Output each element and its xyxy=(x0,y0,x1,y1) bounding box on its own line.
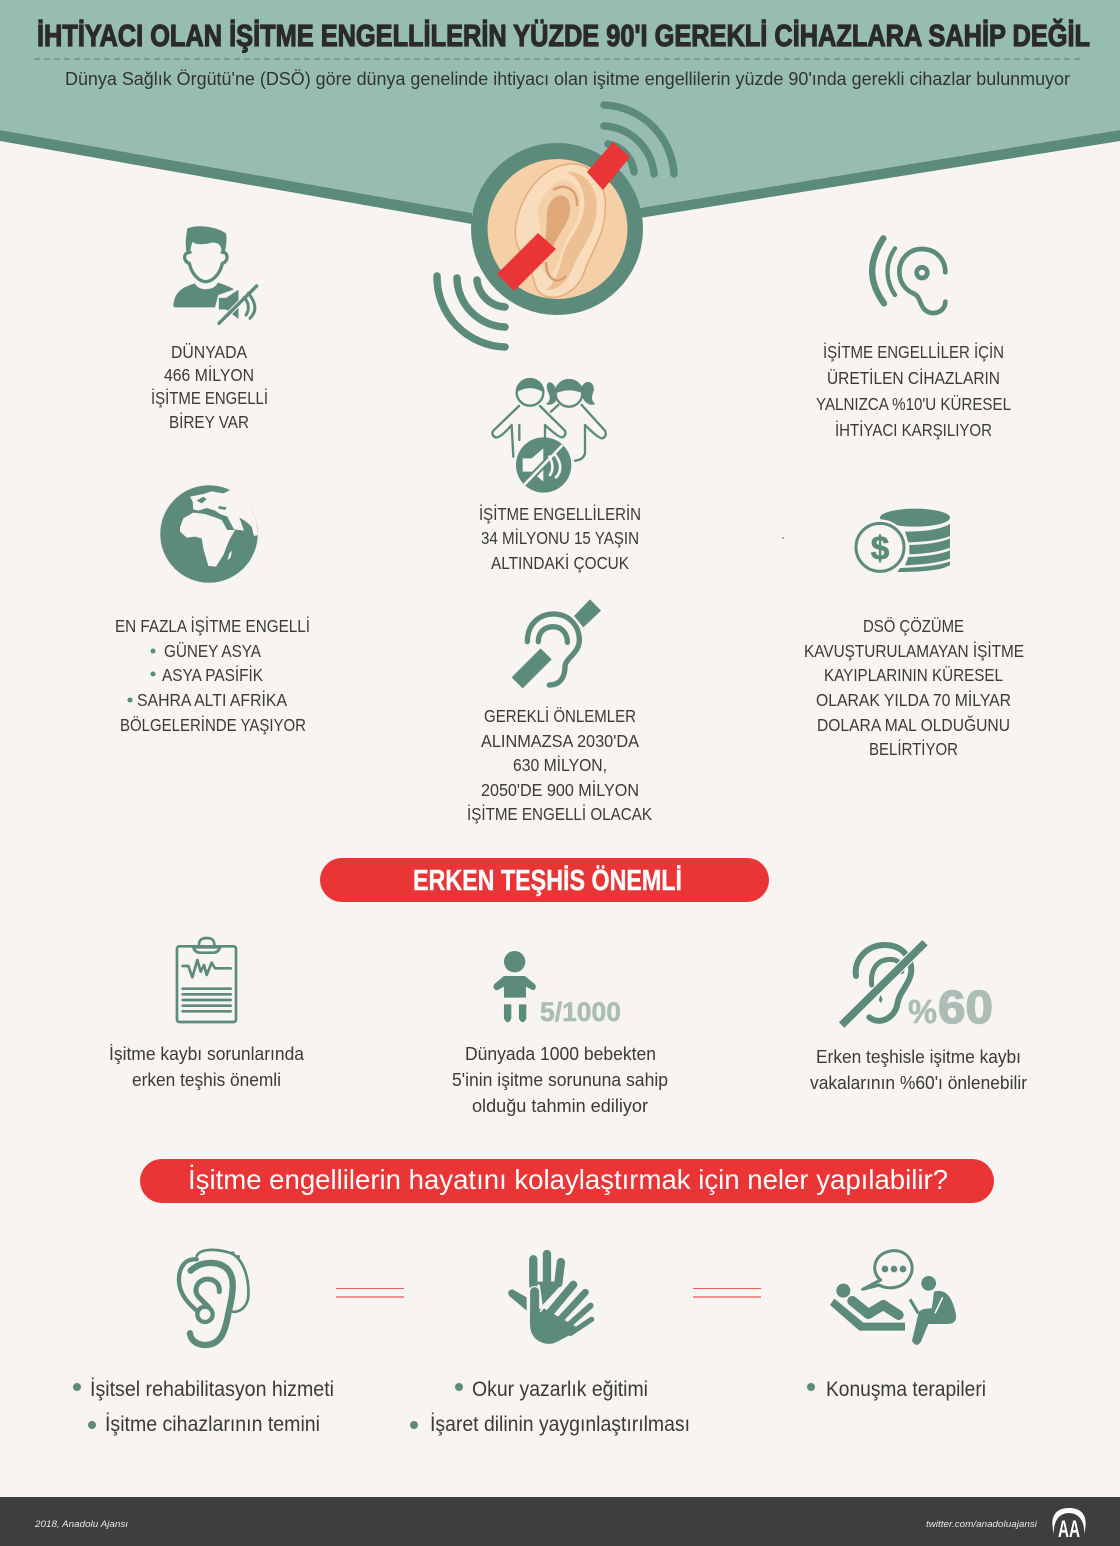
stat: %60: 60 xyxy=(938,981,993,1033)
text: devices: ÜRETİLEN CİHAZLARIN xyxy=(827,368,1000,388)
text: cost: OLARAK YILDA 70 MİLYAR xyxy=(816,690,1011,710)
text: children: 34 MİLYONU 15 YAŞIN xyxy=(481,528,639,548)
icon: globe xyxy=(160,485,258,583)
footer twitter: twitter.com/anadoluajansi xyxy=(926,1519,1038,1530)
stat: %60: % xyxy=(908,993,937,1030)
heading: early diagnosis xyxy=(320,858,769,902)
icon: speech therapy xyxy=(830,1251,956,1345)
subtitle: Dünya Sağlık Örgütü'ne (DSÖ) göre dünya genelinde ihtiyacı olan işitme engellilerin yüzde 90'ında gerekli cihazlar bulunmuyor xyxy=(65,69,1070,89)
footer credit: 2018, Anadolu Ajansı xyxy=(34,1519,128,1530)
text: children: İŞİTME ENGELLİLERİN xyxy=(479,504,641,524)
text: devices: İŞİTME ENGELLİLER İÇİN xyxy=(823,342,1004,362)
heading: what can be done xyxy=(140,1159,994,1203)
list: education: İşaret dilinin yaygınlaştırılması xyxy=(430,1413,690,1436)
text: early diagnosis: erken teşhis önemli xyxy=(132,1070,281,1090)
text: 466 milyon: DÜNYADA xyxy=(171,342,247,362)
header band xyxy=(0,0,1120,224)
icon: coins xyxy=(852,509,950,575)
logo: AA: AA xyxy=(1058,1516,1080,1543)
list: rehabilitation: İşitme cihazlarının temini xyxy=(105,1413,320,1436)
text: children: ALTINDAKİ ÇOCUK xyxy=(491,553,629,573)
icon: ear with red bar xyxy=(471,142,643,315)
icon: upper sound waves xyxy=(604,105,674,174)
text: children xyxy=(479,504,641,573)
divider: left xyxy=(336,1288,404,1297)
icon: lower sound waves xyxy=(437,276,505,347)
icon: coins: $ xyxy=(871,530,890,567)
icon: ear with hearing aid xyxy=(179,1250,248,1345)
text: cost: KAYIPLARININ KÜRESEL xyxy=(824,665,1003,685)
text: prevention: vakalarının %60'ı önlenebilir xyxy=(810,1073,1027,1093)
text: 466 milyon: 466 MİLYON xyxy=(164,365,254,385)
text: projection: 630 MİLYON, xyxy=(513,755,607,775)
text: prevention: Erken teşhisle işitme kaybı xyxy=(816,1047,1021,1067)
stat: 5/1000: 5/1000 xyxy=(540,997,621,1027)
text: projection xyxy=(467,706,652,824)
text: projection: 2050'DE 900 MİLYON xyxy=(481,780,639,800)
heading: early diagnosis: ERKEN TEŞHİS ÖNEMLİ xyxy=(413,864,682,897)
heading: what can be done: İşitme engellilerin hayatını kolaylaştırmak için neler yapılabilir? xyxy=(188,1164,948,1195)
icon: sign language hands xyxy=(508,1254,592,1344)
footer xyxy=(0,1497,1120,1546)
text: projection: GEREKLİ ÖNLEMLER xyxy=(484,706,636,726)
icon: man muted xyxy=(173,226,257,323)
icon: children muted xyxy=(492,379,606,493)
text: regions xyxy=(115,616,310,735)
text: cost xyxy=(804,616,1024,759)
text: devices xyxy=(816,342,1011,440)
text: cost: BELİRTİYOR xyxy=(869,739,958,759)
icon: ear with waves xyxy=(872,238,945,313)
text: regions: BÖLGELERİNDE YAŞIYOR xyxy=(120,715,306,735)
text: cost: KAVUŞTURULAMAYAN İŞİTME xyxy=(804,641,1024,661)
text: babies: 5'inin işitme sorununa sahip xyxy=(452,1070,668,1090)
icon: hearing loss symbol xyxy=(512,599,601,688)
text: 466 milyon: İŞİTME ENGELLİ xyxy=(151,388,268,408)
text: 466 milyon: BİREY VAR xyxy=(169,412,249,432)
list: rehabilitation: İşitsel rehabilitasyon hizmeti xyxy=(90,1378,334,1401)
text: cost: DOLARA MAL OLDUĞUNU xyxy=(817,714,1010,735)
text: regions: ASYA PASİFİK xyxy=(162,665,263,685)
text: early diagnosis xyxy=(109,1044,305,1090)
list: education xyxy=(410,1378,690,1436)
divider: right xyxy=(693,1288,761,1297)
icon: crossed ear xyxy=(842,943,925,1025)
icon: baby xyxy=(493,951,536,1022)
text: devices: İHTİYACI KARŞILIYOR xyxy=(835,420,992,440)
text: cost: DSÖ ÇÖZÜME xyxy=(863,616,964,636)
logo: AA xyxy=(1052,1508,1086,1543)
text: devices: YALNIZCA %10'U KÜRESEL xyxy=(816,394,1011,414)
text: early diagnosis: İşitme kaybı sorunlarında xyxy=(109,1044,305,1064)
text: babies: Dünyada 1000 bebekten xyxy=(465,1044,656,1064)
list: education: Okur yazarlık eğitimi xyxy=(472,1378,648,1401)
list: therapy: Konuşma terapileri xyxy=(826,1378,986,1401)
list: rehabilitation xyxy=(73,1378,334,1436)
text: regions: SAHRA ALTI AFRİKA xyxy=(137,690,287,710)
text: projection: İŞİTME ENGELLİ OLACAK xyxy=(467,804,652,824)
text: babies xyxy=(452,1044,668,1116)
text: regions: GÜNEY ASYA xyxy=(164,641,261,661)
text: projection: ALINMAZSA 2030'DA xyxy=(481,731,639,751)
text: 466 milyon xyxy=(151,342,268,432)
text: regions: EN FAZLA İŞİTME ENGELLİ xyxy=(115,616,310,636)
icon: clipboard xyxy=(177,938,236,1022)
stat: %60 xyxy=(908,981,993,1033)
text: prevention xyxy=(810,1047,1027,1093)
text: babies: olduğu tahmin ediliyor xyxy=(472,1096,648,1116)
